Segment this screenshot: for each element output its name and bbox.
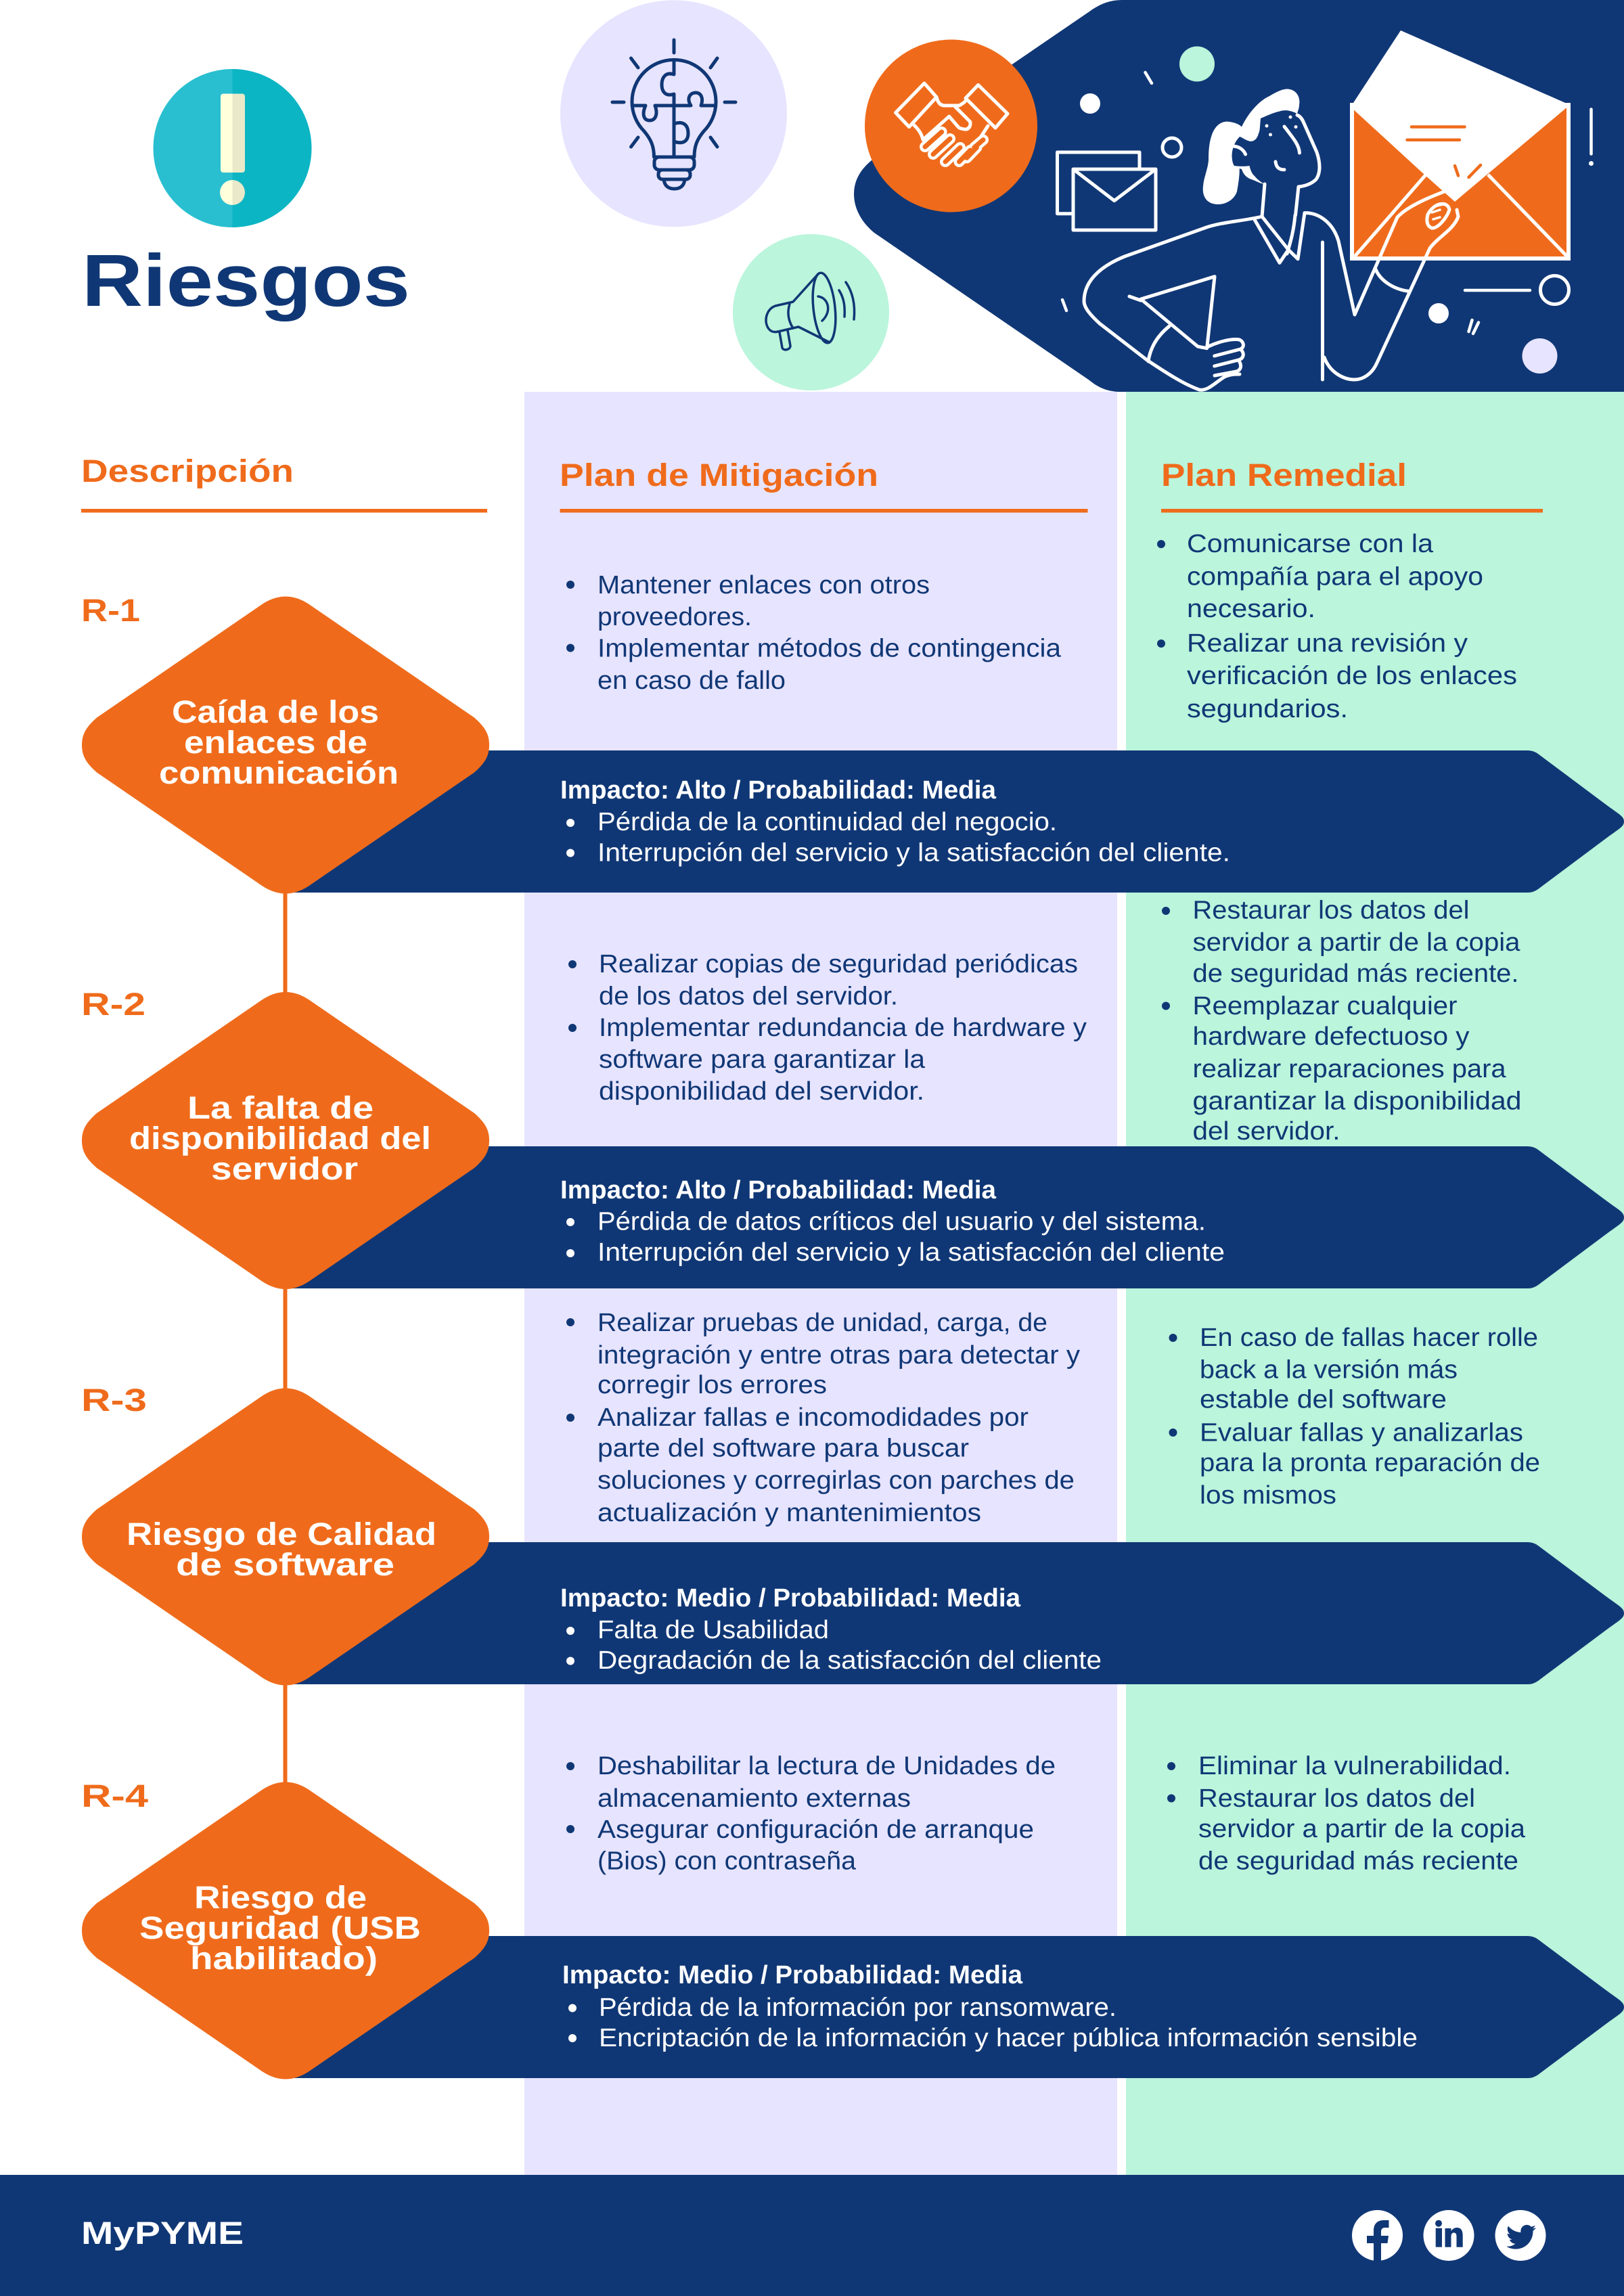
heading: Plan Remedial xyxy=(1161,457,1543,513)
heading: Descripción: Descripción xyxy=(81,453,294,489)
diamond: risk 2: disponibilidad del xyxy=(129,1120,431,1156)
icon: exclamation badge xyxy=(154,69,312,227)
row 4 mitigation text: almacenamiento externas xyxy=(597,1784,911,1813)
diamond: risk 1: Caída de los xyxy=(172,694,379,729)
icon: megaphone xyxy=(733,234,889,390)
row 2 mitigation text: Implementar redundancia de hardware y xyxy=(599,1014,1087,1042)
row 1 remedial text: verificación de los enlaces xyxy=(1187,662,1517,690)
row 2 remedial text: garantizar la disponibilidad xyxy=(1192,1087,1521,1115)
icon: facebook xyxy=(1352,2210,1403,2261)
row 4 remedial text: Eliminar la vulnerabilidad. xyxy=(1198,1752,1511,1780)
row 2 mitigation text: Realizar copias de seguridad periódicas xyxy=(599,950,1078,978)
diamond: risk 4 xyxy=(82,1782,489,2079)
icon: linkedin xyxy=(1424,2210,1474,2261)
diamond: risk 4: Riesgo de xyxy=(194,1879,367,1915)
risk label R-4: R-4 xyxy=(81,1778,148,1814)
footer brand: MyPYME xyxy=(81,2215,244,2251)
row 1 impact arrow: Interrupción del servicio y la satisfacción del cliente. xyxy=(597,839,1230,868)
row 2 remedial text: hardware defectuoso y xyxy=(1192,1022,1470,1051)
row 1 remedial text: compañía para el apoyo xyxy=(1187,563,1483,591)
footer bar xyxy=(0,2175,1624,2296)
row 2 remedial text: Restaurar los datos del xyxy=(1192,896,1470,924)
row 4 remedial text: de seguridad más reciente xyxy=(1198,1847,1518,1876)
diamond: risk 2: servidor xyxy=(211,1150,358,1186)
icon: woman line drawing xyxy=(1084,89,1458,390)
panel: remedial column background xyxy=(1126,392,1624,2176)
row 2 impact arrow: Pérdida de datos críticos del usuario y del sistema. xyxy=(597,1207,1206,1236)
row 3 mitigation text: Analizar fallas e incomodidades por xyxy=(597,1403,1029,1432)
diamond: risk 2 xyxy=(82,992,489,1289)
diamond: risk 3: de software xyxy=(176,1546,394,1582)
row 1 mitigation text: Mantener enlaces con otros xyxy=(597,571,930,600)
row 4 remedial text xyxy=(1167,1752,1526,1876)
panel: mitigation column background xyxy=(524,392,1117,2176)
icon: decorative dots xyxy=(1062,46,1594,374)
row 2 remedial text xyxy=(1162,896,1521,1146)
heading: Plan de Mitigación xyxy=(560,457,1088,513)
row 3 mitigation text: Realizar pruebas de unidad, carga, de xyxy=(597,1309,1047,1337)
row 3 mitigation text: actualización y mantenimientos xyxy=(597,1499,981,1527)
title: Riesgos xyxy=(82,240,410,322)
diamond: risk 4: habilitado) xyxy=(190,1940,378,1976)
row 4 impact arrow: Pérdida de la información por ransomware. xyxy=(599,1994,1116,2022)
icon: small envelope xyxy=(1057,152,1156,230)
diamond: risk 3 xyxy=(82,1389,489,1685)
row 3 remedial text: los mismos xyxy=(1200,1481,1336,1510)
row 1 mitigation text: Implementar métodos de contingencia xyxy=(597,635,1062,663)
row 3 remedial text: para la pronta reparación de xyxy=(1200,1449,1540,1477)
icon: open envelope with letter xyxy=(1351,30,1570,258)
diamond: risk 4: Seguridad (USB xyxy=(139,1910,421,1945)
row 4 mitigation text: Deshabilitar la lectura de Unidades de xyxy=(597,1752,1056,1780)
heading: Plan Remedial: Plan Remedial xyxy=(1161,457,1407,493)
row 1 impact arrow xyxy=(284,750,1624,893)
row 2 remedial text: de seguridad más reciente. xyxy=(1192,960,1518,988)
diamond: risk 3: Riesgo de Calidad xyxy=(127,1516,436,1552)
row 4 mitigation text: (Bios) con contraseña xyxy=(597,1847,857,1876)
row 1 remedial text: Comunicarse con la xyxy=(1187,530,1434,558)
diamond: risk 1: enlaces de xyxy=(184,724,367,760)
row 4 mitigation text xyxy=(566,1752,1056,1876)
row 4 impact arrow: Impacto: Medio / Probabilidad: Media xyxy=(562,1961,1023,1989)
heading: Plan de Mitigación: Plan de Mitigación xyxy=(560,457,878,493)
row 3 mitigation text: soluciones y corregirlas con parches de xyxy=(597,1466,1075,1495)
row 2 remedial text: del servidor. xyxy=(1192,1117,1340,1146)
icon: handshake xyxy=(865,39,1037,212)
illustration: navy hero shape with woman and envelope xyxy=(854,0,1624,392)
diamond: risk 2: La falta de xyxy=(187,1089,374,1125)
row 1 remedial text: segundarios. xyxy=(1187,695,1348,723)
row 2 mitigation text xyxy=(568,950,1087,1106)
row 3 mitigation text xyxy=(566,1309,1080,1527)
diamond: risk 1 xyxy=(82,597,489,893)
row 4 remedial text: servidor a partir de la copia xyxy=(1198,1815,1526,1843)
row 1 mitigation text xyxy=(566,571,1062,695)
diamond: risk 1: comunicación xyxy=(159,755,399,790)
row 3 remedial text: Evaluar fallas y analizarlas xyxy=(1200,1418,1523,1447)
row 1 mitigation text: proveedores. xyxy=(597,603,752,631)
row 3 impact arrow xyxy=(284,1542,1624,1684)
row 3 impact arrow: Degradación de la satisfacción del cliente xyxy=(597,1646,1102,1675)
row 3 mitigation text: parte del software para buscar xyxy=(597,1435,969,1463)
row 4 mitigation text: Asegurar configuración de arranque xyxy=(597,1816,1034,1844)
row 1 impact arrow: Impacto: Alto / Probabilidad: Media xyxy=(560,776,997,805)
risk label R-3: R-3 xyxy=(81,1382,147,1418)
risk label R-1: R-1 xyxy=(81,592,140,628)
row 1 mitigation text: en caso de fallo xyxy=(597,667,786,695)
row 3 remedial text: En caso de fallas hacer rolle xyxy=(1200,1324,1538,1352)
row 1 remedial text xyxy=(1157,530,1517,723)
connector lines between risks xyxy=(283,880,287,1793)
row 2 remedial text: Reemplazar cualquier xyxy=(1192,992,1458,1020)
icon: puzzle light bulb xyxy=(560,0,787,227)
row 4 remedial text: Restaurar los datos del xyxy=(1198,1784,1475,1813)
row 1 remedial text: necesario. xyxy=(1187,595,1315,623)
row 2 impact arrow: Interrupción del servicio y la satisfacción del cliente xyxy=(597,1238,1225,1267)
row 2 remedial text: realizar reparaciones para xyxy=(1192,1055,1506,1083)
row 3 mitigation text: integración y entre otras para detectar y xyxy=(597,1341,1080,1370)
row 2 impact arrow: Impacto: Alto / Probabilidad: Media xyxy=(560,1176,997,1205)
row 2 impact arrow xyxy=(284,1146,1624,1288)
icon: twitter xyxy=(1495,2210,1546,2261)
row 3 impact arrow: Impacto: Medio / Probabilidad: Media xyxy=(560,1584,1021,1613)
heading: Descripción xyxy=(81,453,487,513)
row 3 remedial text xyxy=(1169,1324,1540,1510)
risk label R-2: R-2 xyxy=(81,986,145,1022)
row 2 mitigation text: de los datos del servidor. xyxy=(599,983,898,1011)
row 1 remedial text: Realizar una revisión y xyxy=(1187,629,1468,658)
row 4 impact arrow xyxy=(284,1936,1624,2078)
row 3 remedial text: back a la versión más xyxy=(1200,1356,1458,1385)
row 4 impact arrow: Encriptación de la información y hacer pública información sensible xyxy=(599,2024,1418,2052)
row 2 remedial text: servidor a partir de la copia xyxy=(1192,928,1520,957)
row 2 mitigation text: disponibilidad del servidor. xyxy=(599,1077,924,1106)
row 3 remedial text: estable del software xyxy=(1200,1386,1447,1414)
row 3 mitigation text: corregir los errores xyxy=(597,1371,827,1399)
row 3 impact arrow: Falta de Usabilidad xyxy=(597,1616,829,1644)
row 1 impact arrow: Pérdida de la continuidad del negocio. xyxy=(597,808,1057,836)
row 2 mitigation text: software para garantizar la xyxy=(599,1045,926,1074)
